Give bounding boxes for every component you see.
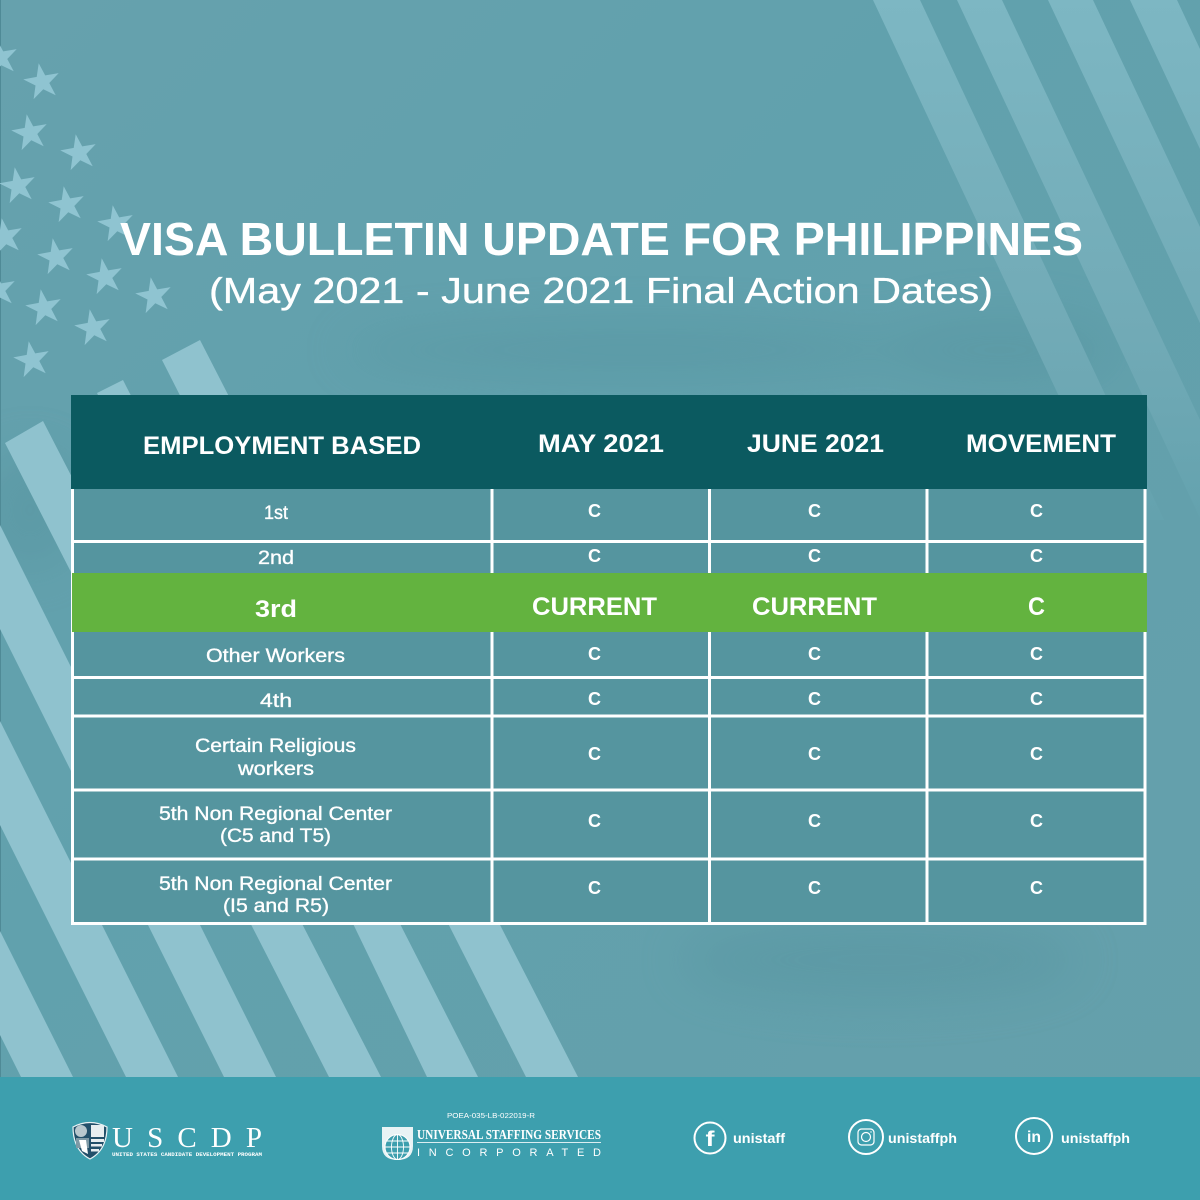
row: other workers: C bbox=[588, 644, 601, 664]
social: linkedin: unistaffph bbox=[1061, 1130, 1130, 1146]
row: certain religious workers bbox=[195, 736, 1043, 780]
row: 5th non regional center C5 and T5: C bbox=[1030, 811, 1043, 831]
title: VISA BULLETIN UPDATE FOR PHILIPPINES bbox=[120, 213, 1083, 265]
social: facebook bbox=[694, 1122, 785, 1154]
row: 5th non regional center C5 and T5: C bbox=[588, 811, 601, 831]
table header row bbox=[71, 395, 1147, 489]
row: certain religious workers: C bbox=[588, 744, 601, 764]
table header row: JUNE 2021 bbox=[747, 430, 884, 458]
social: instagram: unistaffph bbox=[888, 1130, 957, 1146]
row: other workers: Other Workers bbox=[206, 646, 345, 667]
logo: USCDP: UNITED STATES CANDIDATE DEVELOPMENT PROGRAM bbox=[112, 1151, 263, 1158]
row: 1st bbox=[264, 501, 1043, 524]
row: 3rd highlighted: C bbox=[1028, 593, 1045, 621]
icon: facebook: f bbox=[706, 1128, 716, 1151]
row: 3rd highlighted: CURRENT bbox=[532, 593, 657, 621]
table header row: MAY 2021 bbox=[538, 430, 664, 458]
row: 5th non regional center I5 and R5: C bbox=[1030, 878, 1043, 898]
row: 5th non regional center I5 and R5: C bbox=[588, 878, 601, 898]
row: 5th non regional center I5 and R5 bbox=[159, 874, 1043, 917]
row: 5th non regional center C5 and T5 bbox=[159, 804, 1043, 847]
subtitle: (May 2021 - June 2021 Final Action Dates) bbox=[209, 270, 993, 311]
row: 4th: C bbox=[808, 689, 821, 709]
row: 1st: C bbox=[808, 501, 821, 521]
icon: globe bbox=[382, 1127, 413, 1160]
row: 1st: C bbox=[588, 501, 601, 521]
row: certain religious workers: C bbox=[1030, 744, 1043, 764]
row: 2nd bbox=[258, 546, 1043, 569]
row: 2nd: 2nd bbox=[258, 548, 294, 569]
row: 4th bbox=[260, 689, 1043, 712]
footer bar bbox=[0, 1077, 1200, 1200]
table grid lines bbox=[72, 489, 1146, 925]
flag stars bbox=[0, 36, 174, 378]
icon: instagram bbox=[849, 1120, 883, 1154]
social: instagram bbox=[849, 1120, 957, 1154]
row: 3rd highlighted bbox=[72, 573, 1147, 632]
flag stripes top right bbox=[873, 0, 1200, 520]
row: 1st: C bbox=[1030, 501, 1043, 521]
row: other workers: C bbox=[808, 644, 821, 664]
row: 2nd: C bbox=[588, 546, 601, 566]
table body fill bbox=[72, 489, 1146, 924]
row: other workers bbox=[206, 644, 1043, 667]
row: 5th non regional center C5 and T5: C bbox=[808, 811, 821, 831]
flag stripes bottom left bbox=[0, 340, 578, 1077]
logo: Universal Staffing Services: INCORPORATED bbox=[417, 1147, 601, 1159]
row: 4th: 4th bbox=[260, 691, 292, 712]
row: other workers: C bbox=[1030, 644, 1043, 664]
row: certain religious workers: Certain Religious bbox=[195, 736, 356, 757]
logo: USCDP: USCDP bbox=[112, 1122, 262, 1154]
social: linkedin bbox=[1016, 1118, 1130, 1154]
logo: USCDP bbox=[73, 1122, 263, 1159]
icon: USCDP shield bbox=[73, 1122, 107, 1159]
table header row: EMPLOYMENT BASED bbox=[143, 432, 421, 460]
row: 3rd highlighted: CURRENT bbox=[752, 593, 877, 621]
row: 5th non regional center I5 and R5: 5th Non Regional Center bbox=[159, 874, 393, 895]
row: 3rd highlighted: 3rd bbox=[255, 596, 297, 623]
license number: POEA-035-LB-022019-R bbox=[447, 1111, 536, 1120]
icon: linkedin: in bbox=[1027, 1129, 1041, 1146]
row: 2nd: C bbox=[1030, 546, 1043, 566]
row: 4th: C bbox=[1030, 689, 1043, 709]
row: 4th: C bbox=[588, 689, 601, 709]
row: certain religious workers: workers bbox=[237, 759, 314, 780]
logo: Universal Staffing Services: UNIVERSAL STAFFING SERVICES bbox=[417, 1127, 601, 1142]
row: 5th non regional center C5 and T5: (C5 and T5) bbox=[220, 826, 331, 847]
row: 5th non regional center I5 and R5: (I5 and R5) bbox=[223, 896, 329, 917]
table header row: MOVEMENT bbox=[966, 430, 1116, 458]
logo: Universal Staffing Services bbox=[382, 1111, 601, 1160]
table bbox=[71, 395, 1147, 925]
row: 1st: 1st bbox=[264, 503, 289, 524]
row: 2nd: C bbox=[808, 546, 821, 566]
row: certain religious workers: C bbox=[808, 744, 821, 764]
row: 5th non regional center C5 and T5: 5th Non Regional Center bbox=[159, 804, 393, 825]
social: facebook: unistaff bbox=[733, 1130, 785, 1146]
row: 5th non regional center I5 and R5: C bbox=[808, 878, 821, 898]
